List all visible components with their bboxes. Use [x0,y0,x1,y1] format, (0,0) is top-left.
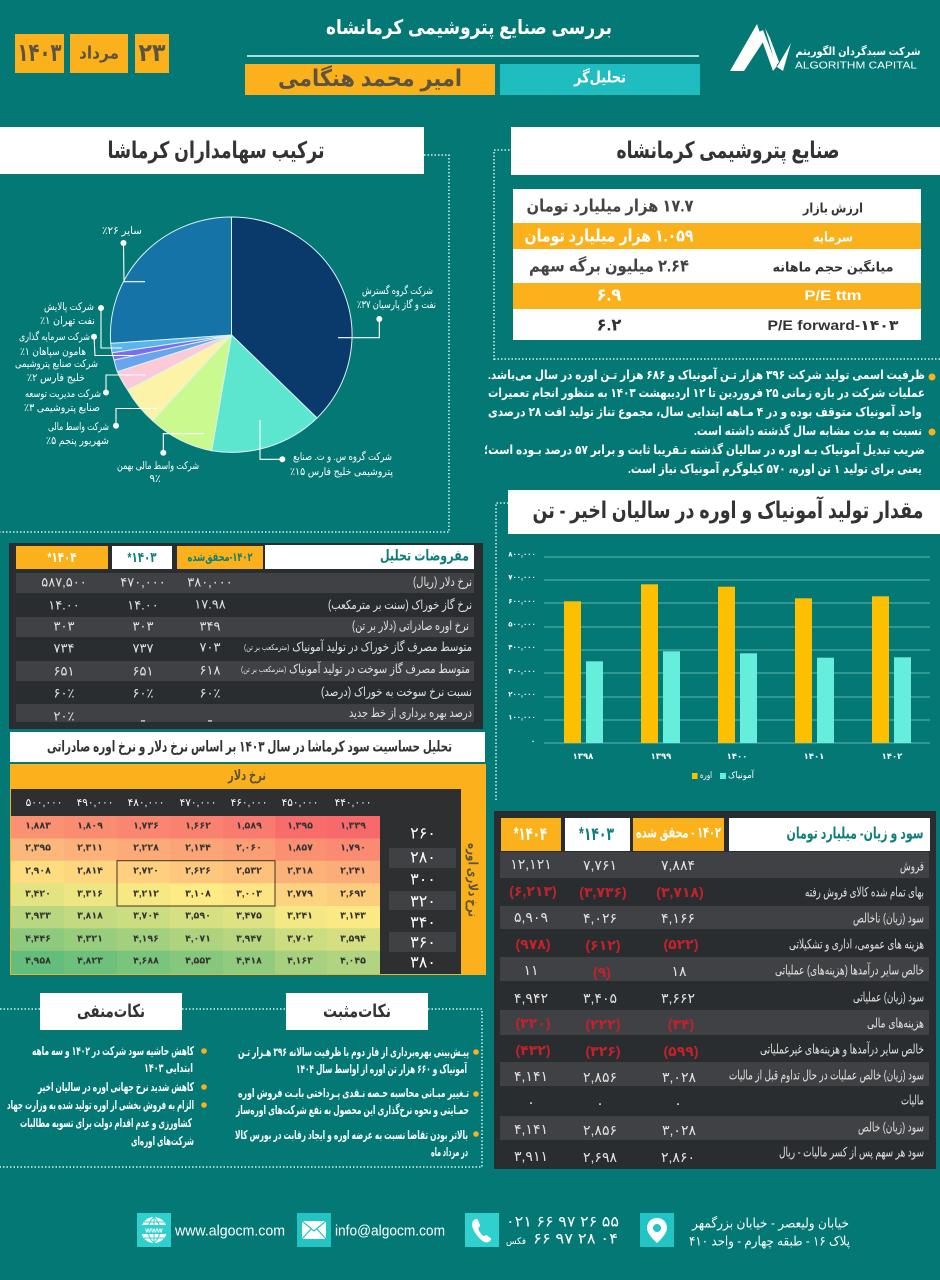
assumption values: ـ [207,710,212,724]
y axis labels: ۳۰۰,۰۰۰ [508,668,536,676]
assumption row labels: متوسط مصرف گاز خوراک در تولید آمونیاک (مترمکعب بر تن) [244,639,472,655]
assumption values: ۶۰٪ [200,686,220,700]
heatmap values: ۱,۳۹۵ [287,820,313,832]
heatmap row headers: ۲۶۰ [410,826,436,842]
x axis labels: ۱۳۹۸ [573,751,594,761]
icon: envelope [297,1213,331,1247]
pie labels: شرکت پالایش [44,301,94,313]
x axis labels: ۱۴۰۰ [727,751,747,761]
header: date boxes: مرداد [79,44,119,64]
icon: location pin [640,1213,674,1247]
profit and loss values: (۳۴) [668,1016,694,1032]
icon: globe: www [144,1226,163,1234]
heatmap values: ۱,۳۳۹ [340,820,366,832]
heatmap values: ۲,۶۹۲ [340,888,366,900]
profit and loss values: ۵,۹۰۹ [514,909,548,925]
profit and loss values: ۴,۱۴۱ [514,1121,548,1137]
pie labels: شرکت سرمایه گذاری [19,330,90,343]
table: profit sensitivity heatmap [10,732,486,975]
pie labels: شرکت گروه گسترش [362,284,433,297]
heatmap values: ۲,۸۱۴ [77,866,103,876]
heatmap values: ۳,۹۳۳ [25,910,51,922]
panel: negative notes: کاهش شدید نرخ جهانی اوره در سالیان اخیر [37,1080,194,1095]
panel: shareholders pie chart [0,127,449,532]
heatmap values: ۳,۵۹۰ [185,910,211,922]
heatmap values: ۳,۲۱۲ [133,888,159,900]
table: analysis assumptions [9,543,483,729]
footer: email [297,1213,445,1247]
pie labels: نفت تهران ۱٪ [40,315,95,327]
assumption values: ۷۳۴ [54,640,74,656]
heatmap column headers: ۴۶۰,۰۰۰ [231,797,267,809]
heatmap column headers [26,797,371,809]
heatmap values: ۴,۴۴۶ [25,934,51,944]
profit and loss values: ۷,۸۸۴ [661,857,695,873]
y axis labels [508,552,536,746]
panel: positive notes: حمـایتی و نحوه نرخ‌گذاری این محصول به نفع شرکت‌های اوره‌ساز [235,1103,469,1118]
heatmap values: ۱,۵۸۹ [236,820,262,832]
table: profit and loss: ۱۴۰۴* [514,824,547,844]
profit and loss values: (۳,۷۱۸) [656,884,704,900]
table: profit and loss: ۱۴۰۲ - محقق شده [636,824,721,842]
assumption row labels: نرخ گاز خوراک (سنت بر مترمکعب) [328,597,472,613]
profit and loss values: ۲,۸۵۶ [583,1069,617,1085]
heatmap values: ۲,۵۳۲ [236,866,262,876]
heatmap values [25,820,366,966]
heatmap row headers: ۳۶۰ [410,934,436,952]
profit and loss values: (۶۱۲) [586,937,620,953]
heatmap values: ۳,۴۲۰ [25,888,51,900]
heatmap row headers: ۳۸۰ [410,954,436,972]
heatmap values: ۳,۸۱۸ [77,910,103,922]
heatmap values: ۳,۷۰۴ [133,910,159,922]
assumption values: ۱۴.۰۰ [127,598,159,612]
icon: globe [137,1213,171,1247]
heatmap values: ۲,۲۲۸ [133,842,159,854]
assumption values: ۶۵۱ [133,664,153,678]
profit and loss values: (۵۹۹) [664,1043,698,1059]
table: key market figures: ۱۷.۷ هزار میلیارد تومان [526,196,694,216]
header: analyst label: تحلیل‌گر [573,68,626,86]
profit and loss values: (۴۳۲) [516,1042,550,1058]
panel: Kermanshah petrochemical summary [494,127,940,360]
panel: negative notes: کاهش حاشیه سود شرکت در ۱۴۰۲ و سه ماهه [32,1044,194,1059]
profit and loss values: ۳,۰۲۸ [662,1122,696,1138]
pie labels: هامون سپاهان ۱٪ [20,346,86,358]
panel: negative notes: کشاورزی و عدم اقدام دولت برای تسویه مطالبات [20,1116,192,1131]
panel: shareholders pie chart: ترکیب سهامداران کرماشا [108,137,324,164]
profit and loss values: ۰ [674,1095,682,1111]
heatmap values: ۳,۳۱۶ [77,888,103,900]
heatmap values: ۴,۰۷۱ [185,934,211,944]
profit and loss values: ۳,۶۶۲ [661,990,695,1006]
assumption values: ۶۵۱ [54,664,74,678]
chart legend: آمونیاک [728,769,754,780]
heatmap values: ۲,۹۰۸ [25,866,51,876]
x axis labels: ۱۴۰۱ [804,751,824,761]
assumption values: ۵۸۷,۵۰۰ [41,574,87,590]
assumption values: ۱۷.۹۸ [194,596,226,612]
pie labels: شرکت صنایع پتروشیمی [15,358,98,370]
heatmap values: ۲,۳۱۱ [77,842,103,854]
text block: production description: یعنی برای تولید ۱ تن اوره، ۵۷۰ کیلوگرم آمونیاک نیاز است. [628,461,922,477]
profit and loss values: (۶,۲۱۳) [509,883,557,899]
table: analysis assumptions: ۱۴۰۲-محقق‌شده [188,550,253,564]
table: profit sensitivity heatmap: نرخ دلاری اوره [466,843,480,917]
heatmap row headers: ۳۲۰ [410,894,436,910]
assumption values: ۶۰٪ [133,686,153,700]
table: key market figures: ۶.۹ [596,286,622,304]
table: key market figures [513,189,921,340]
pie labels: خلیج فارس ۲٪ [27,372,85,384]
assumption values: ۳۸۰,۰۰۰ [187,574,233,590]
header: date boxes [15,34,169,73]
profit and loss values: ۳,۰۲۸ [662,1069,696,1085]
heatmap values: ۲,۱۴۴ [185,842,211,854]
pie labels: شرکت مدیریت توسعه [25,388,101,400]
profit and loss values: ۰ [527,1094,535,1110]
heatmap values: ۴,۱۹۶ [133,934,159,944]
footer: phone: ۰۲۱ ۶۶ ۹۷ ۲۶ ۵۵ [506,1214,619,1230]
footer: address: خیابان ولیعصر - خیابان بزرگمهر [691,1216,849,1232]
heatmap values: ۲,۳۱۸ [287,866,313,876]
profit and loss values: ۱۱ [523,962,539,978]
assumption row labels [241,575,472,721]
footer: website [137,1213,285,1247]
panel: negative notes [7,993,207,1149]
footer: phone: ۶۶ ۹۷ ۲۸ ۰۴ [533,1230,618,1248]
profit and loss values [509,856,704,1165]
bars: urea [564,584,889,743]
heatmap values: ۴,۱۶۳ [287,956,313,966]
assumption values: ۳۴۹ [200,618,220,634]
heatmap column headers: ۴۷۰,۰۰۰ [180,797,216,809]
table: key market figures: P/E forward-۱۴۰۳ [768,317,899,333]
bars: ammonia [586,651,911,743]
footer: address [640,1213,850,1250]
assumption values: ۶۱۸ [200,662,220,678]
panel: negative notes: الزام به فروش بخشی از اوره تولید شده به وزارت جهاد [7,1098,194,1113]
profit and loss values: ۳,۹۱۱ [514,1148,548,1164]
heatmap column headers: ۵۰۰,۰۰۰ [26,797,62,809]
heatmap values: ۳,۴۷۵ [236,910,262,922]
profit and loss values: (۹) [593,964,611,980]
y axis labels: ۲۰۰,۰۰۰ [508,692,536,698]
logo: Algorithm Capital [730,24,920,72]
heatmap values: ۲,۷۲۰ [133,866,159,876]
heatmap values: ۴,۴۱۸ [236,956,262,966]
header: report title: بررسی صنایع پتروشیمی کرمانشاه [326,17,612,40]
heatmap values: ۱,۸۸۳ [25,820,51,832]
y axis labels: ۵۰۰,۰۰۰ [508,622,536,628]
pie labels [15,225,436,485]
panel: positive notes [235,993,479,1159]
pie labels: شهریور پنجم ۵٪ [46,435,109,447]
y axis labels: ۷۰۰,۰۰۰ [508,574,536,582]
assumption row labels: نرخ دلار (ریال) [413,575,472,590]
profit and loss row labels: مالیات [901,1092,924,1108]
header: date boxes: ۲۳ [138,39,166,67]
assumption values: ۳۰۳ [133,618,153,634]
profit and loss values: ۴,۱۶۶ [661,910,695,926]
panel: positive notes: بالاتر بودن تقاضا نسبت به عرضه اوره و ایجاد رقابت در بورس کالا [235,1128,468,1143]
profit and loss values: ۲,۶۹۸ [583,1149,617,1165]
y axis labels: ۰ [531,738,535,746]
profit and loss row labels: فروش [900,858,924,874]
heatmap values: ۴,۹۵۸ [25,956,51,966]
heatmap values: ۳,۱۰۸ [185,888,211,900]
assumption values: ۷۰۳ [200,640,220,654]
chart legend [692,769,754,780]
table: key market figures: ارزش بازار [802,200,863,216]
heatmap values: ۲,۶۲۶ [185,866,211,876]
table: analysis assumptions: ۱۴۰۴* [48,549,77,565]
heatmap values: ۴,۵۵۳ [185,956,211,966]
x axis labels: ۱۳۹۹ [651,751,672,761]
heatmap values: ۱,۸۰۹ [77,820,103,832]
pie chart [110,217,352,452]
y axis labels: ۱۰۰,۰۰۰ [508,714,536,722]
assumption values: ۳۰۳ [54,618,74,634]
profit and loss values: (۵۲۲) [664,936,698,952]
pie labels: ۹٪ [149,473,161,485]
pie labels: پتروشیمی خلیج فارس ۱۵٪ [290,466,393,478]
footer: phone [465,1213,619,1248]
assumption row labels: درصد بهره برداری از خط جدید [349,706,472,721]
x axis labels: ۱۴۰۲ [882,751,903,761]
panel: positive notes: آمونیاک و ۶۶۰ هزار تن اوره از اواسط سال ۱۴۰۴ [296,1061,468,1077]
header: analyst name: امیر محمد هنگامی [278,65,462,92]
heatmap values: ۳,۹۴۷ [236,934,262,944]
table: key market figures: ۲.۶۴ میلیون برگه سهم [529,256,689,276]
icon: phone [465,1213,499,1247]
heatmap row headers: ۳۴۰ [410,914,436,932]
assumption values: ـ [140,710,145,724]
pie labels: شرکت واسط مالی [48,421,109,433]
pie labels: نفت و گاز پارسیان ۳۷٪ [357,298,436,311]
profit and loss values: ۱۸ [671,963,687,979]
heatmap values: ۴,۳۲۱ [77,934,103,944]
heatmap values: ۲,۰۶۰ [236,842,262,854]
table: key market figures: ۶.۲ [596,316,622,334]
heatmap values: ۳,۷۰۲ [287,934,313,944]
panel: positive notes: پیـش‌بینی بهره‌برداری از فاز دوم با ظرفیت سالانه ۳۹۶ هـزار تـن [238,1045,469,1060]
assumption values: ۷۳۷ [133,640,153,656]
table: key market figures: P/E ttm [804,287,862,303]
heatmap values: ۲,۷۷۹ [287,888,313,900]
heatmap values: ۳,۵۹۴ [340,934,366,944]
heatmap row headers [389,826,456,972]
heatmap values: ۳,۰۰۳ [236,888,262,900]
heatmap cells [11,816,380,974]
text block: production description: واحد آمونیاک متوقف بوده و در ۴ مـاهه ابتدایی سال، مجموع تناژ تولید افت ۲۸ درصدی [488,404,922,419]
heatmap values: ۲,۲۴۱ [340,866,366,876]
assumption row labels: متوسط مصرف گاز سوخت در تولید آمونیاک (مترمکعب بر تن) [241,661,470,677]
pie labels: سایر ۲۶٪ [102,225,142,237]
table: key market figures: سرمایه [813,230,853,244]
y axis labels: ۸۰۰,۰۰۰ [508,552,536,558]
assumption values [41,574,233,724]
y axis labels: ۴۰۰,۰۰۰ [508,644,536,652]
pie labels: شرکت گروه س. و ت. صنایع [293,450,392,463]
table: profit sensitivity heatmap: نرخ دلار [227,768,266,784]
heatmap column headers: ۴۹۰,۰۰۰ [77,797,113,809]
assumption row labels: نسبت نرخ سوخت به خوراک (درصد) [321,685,472,700]
heatmap values: ۱,۶۶۲ [185,820,211,832]
heatmap row headers: ۳۰۰ [410,872,436,888]
chart grid [544,557,930,743]
heatmap column headers: ۴۸۰,۰۰۰ [128,797,164,809]
panel: negative notes: ابتدایی ۱۴۰۳ [144,1061,193,1075]
footer: phone: فکس [506,1236,526,1246]
profit and loss values: ۴,۱۴۱ [514,1068,548,1084]
profit and loss values: (۳۲۰) [516,1015,550,1031]
heatmap row headers: ۲۸۰ [410,850,436,866]
heatmap column headers: ۴۴۰,۰۰۰ [335,797,371,809]
panel: Kermanshah petrochemical summary: صنایع پتروشیمی کرمانشاه [616,137,840,164]
header: analyst name [245,64,495,95]
assumption row labels: نرخ اوره صادراتی (دلار بر تن) [352,619,469,634]
profit and loss values: (۳,۷۳۶) [579,884,627,900]
pie labels: صنایع پتروشیمی ۳٪ [24,402,100,414]
panel: positive notes: نکات‌مثبت [323,1001,391,1021]
heatmap values: ۱,۷۳۶ [133,820,159,832]
table: profit and loss [494,811,936,1169]
heatmap column headers: ۴۵۰,۰۰۰ [282,797,318,809]
heatmap values: ۱,۷۹۰ [340,842,366,854]
header: analyst label [500,64,700,95]
footer: email: info@algocm.com [335,1222,445,1240]
heatmap values: ۲,۳۹۵ [25,842,51,854]
panel: notes frame [0,1009,482,1167]
table: key market figures: میانگین حجم ماهانه [772,260,894,274]
panel: production bar chart [496,490,940,800]
pie labels: شرکت واسط مالی بهمن [117,460,199,472]
footer: address: پلاک ۱۶ - طبقه چهارم - واحد ۴۱۰ [689,1234,850,1250]
y axis labels: ۶۰۰,۰۰۰ [508,598,536,606]
table: analysis assumptions: ۱۴۰۳* [127,549,157,565]
profit and loss values: ۷,۷۶۱ [583,857,617,873]
profit and loss values: ۳,۴۰۵ [583,990,617,1006]
x axis labels [573,751,903,761]
table: profit sensitivity heatmap: تحلیل حساسیت سود کرماشا در سال ۱۴۰۳ بر اساس نرخ دلار و نرخ اوره صادراتی [47,738,452,756]
profit and loss row labels [729,858,924,1160]
text block: production description: ظرفیت اسمی تولید شرکت ۳۹۶ هزار تـن آمونیاک و ۶۸۶ هزار تـن اوره در سال می‌باشد. [488,367,925,382]
logo: Algorithm Capital: شرکت سبدگردان الگوریتم [796,45,920,58]
heatmap values: ۴,۰۴۵ [340,956,366,966]
panel: positive notes: در مرداد ماه [431,1145,468,1159]
profit and loss values: (۳۲۶) [586,1043,620,1059]
heatmap values: ۱,۸۵۷ [287,842,313,854]
logo: Algorithm Capital: ALGORITHM CAPITAL [795,60,918,72]
profit and loss values: ۲,۸۶۰ [661,1149,695,1165]
table: profit and loss: ۱۴۰۳* [579,824,614,844]
assumption values: ۲۰٪ [54,708,74,724]
footer: website: www.algocm.com [174,1222,285,1240]
profit and loss values: (۲۲۲) [586,1016,620,1032]
text block: production description [484,367,936,477]
profit and loss values: (۹۷۸) [516,936,550,952]
chart legend: اوره [700,770,712,780]
heatmap values: ۳,۱۴۳ [340,910,366,922]
assumption values: ۱۴.۰۰ [48,598,80,612]
heatmap values: ۴,۸۲۳ [77,956,103,966]
profit and loss values: ۴,۹۴۲ [514,990,548,1006]
assumption values: ۴۷۰,۰۰۰ [120,574,166,590]
profit and loss values: ۱۲,۱۲۱ [510,856,552,872]
panel: negative notes: شرکت‌های اوره‌ای [131,1134,194,1149]
heatmap values: ۴,۶۸۸ [133,956,159,966]
header: date boxes: ۱۴۰۳ [18,39,62,67]
table: analysis assumptions: مفروضات تحلیل [380,548,469,564]
profit and loss values: ۲,۸۵۶ [583,1122,617,1138]
profit and loss values: ۴,۰۲۶ [583,910,617,926]
leader lines and dots [91,240,382,462]
panel: negative notes: نکات‌منفی [77,1001,145,1021]
table: key market figures: ۱.۰۵۹ هزار میلیارد تومان [524,226,694,246]
panel: positive notes: تـغییر مبـانی محاسبه حـصه نـقدی پـرداختی بابـت فروش اوره [238,1086,469,1101]
heatmap values: ۳,۲۴۱ [287,910,313,922]
assumption values: ۶۰٪ [54,686,74,700]
profit and loss values: ۰ [596,1095,604,1111]
